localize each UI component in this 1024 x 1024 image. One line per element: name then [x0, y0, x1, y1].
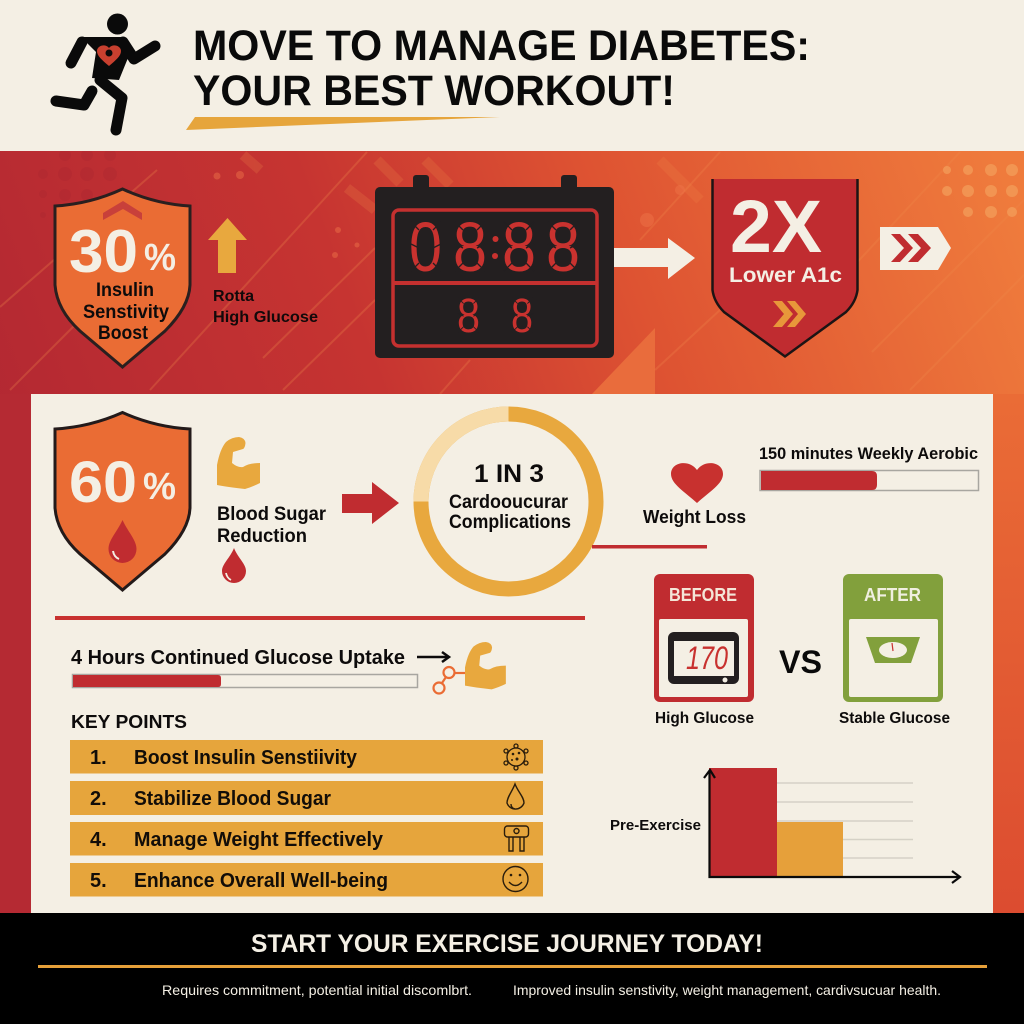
key point 3: [70, 822, 543, 856]
label: blood sugar reduction: Reduction: [217, 526, 307, 547]
main cream panel: [31, 394, 993, 913]
footer: [0, 913, 1024, 1024]
icon: blood drop: [222, 548, 246, 583]
digital timer display: 8: [511, 290, 533, 343]
digital timer display: 0: [409, 208, 442, 286]
key point 1: 1.: [90, 747, 107, 769]
ring stat: 1 in 3: [421, 414, 596, 589]
stat shield: 60%: [55, 412, 190, 590]
red-orange background band: [0, 149, 1024, 913]
label: stable glucose: Stable Glucose: [839, 710, 950, 727]
badge: 2X lower A1c: [712, 179, 858, 357]
before card: 170: [686, 640, 728, 676]
digital timer display: 8: [453, 208, 487, 286]
digital timer display: 8: [457, 290, 480, 343]
icon: heart: [671, 463, 723, 503]
label: high glucose: High Glucose: [655, 710, 754, 727]
icon: upward arrow: [208, 218, 247, 273]
icon: running figure with heart: [56, 14, 155, 130]
digital timer display: [375, 175, 614, 358]
label: weight loss: Weight Loss: [643, 507, 746, 527]
tag: double chevron: [880, 227, 951, 270]
footer: Requires commitment, potential initial discomlbrt.: [162, 982, 472, 998]
key point 3: Manage Weight Effectively: [134, 829, 384, 851]
key point 2: [70, 781, 543, 815]
icon: flexed muscle: [217, 437, 260, 489]
stat shield: 30% insulin sensitivity boost: %: [144, 237, 176, 279]
key point 3: 4.: [90, 829, 107, 851]
ring stat: 1 in 3: Cardooucurar: [449, 492, 569, 513]
label: high glucose: High Glucose: [213, 309, 318, 326]
key point 1: Boost Insulin Senstiivity: [134, 747, 358, 769]
stat shield: 30% insulin sensitivity boost: Senstivity: [83, 302, 169, 323]
digital timer display: 8: [502, 208, 536, 286]
label: vs: VS: [779, 644, 822, 680]
key point 1: [70, 740, 543, 774]
arrow: to muscle: [417, 652, 449, 662]
footer: Improved insulin senstivity, weight management, cardivsucuar health.: [513, 982, 941, 998]
stat shield: 30% insulin sensitivity boost: [55, 189, 190, 367]
stat shield: 30% insulin sensitivity boost: 30: [69, 218, 138, 285]
arrow: red: [342, 482, 399, 524]
key point 4: [70, 863, 543, 896]
key point 2: 2.: [90, 788, 107, 810]
label: blood sugar reduction: [217, 504, 327, 547]
key point 2: Stabilize Blood Sugar: [134, 788, 331, 810]
title: YOUR BEST WORKOUT!: [193, 67, 675, 115]
stat shield: 60%: %: [143, 466, 176, 508]
arrow: timer to badge: [614, 238, 695, 279]
heading: key points: KEY POINTS: [71, 711, 187, 732]
label: high glucose: [213, 288, 318, 326]
progress: 150 minutes weekly aerobic: 150 minutes Weekly Aerobic: [759, 444, 978, 463]
after card: AFTER: [864, 585, 921, 605]
title: MOVE TO MANAGE DIABETES:: [193, 22, 810, 70]
stat shield: 30% insulin sensitivity boost: Insulin: [96, 280, 154, 301]
before card: [654, 574, 754, 702]
header background: [0, 0, 1024, 151]
digital timer display: 8: [546, 208, 580, 286]
title underline swoosh: [186, 117, 500, 130]
stat shield: 60%: 60: [69, 450, 137, 515]
badge: 2X lower A1c: 2X: [730, 185, 822, 268]
progress: 4 hours continued glucose uptake: 4 Hours Continued Glucose Uptake: [71, 647, 405, 669]
progress: 150 minutes weekly aerobic: [759, 444, 978, 490]
after card: [843, 574, 943, 702]
bar chart: pre-exercise: [610, 768, 960, 883]
badge: 2X lower A1c: Lower A1c: [729, 264, 842, 287]
stat shield: 30% insulin sensitivity boost: Boost: [98, 323, 149, 344]
before card: BEFORE: [669, 585, 737, 605]
ring stat: 1 in 3: Complications: [449, 512, 571, 533]
progress: 4 hours continued glucose uptake: [71, 647, 418, 688]
footer: START YOUR EXERCISE JOURNEY TODAY!: [251, 930, 763, 958]
bar chart: pre-exercise: Pre-Exercise: [610, 817, 701, 834]
title: [193, 22, 810, 115]
label: blood sugar reduction: Blood Sugar: [217, 504, 327, 525]
key point 4: 5.: [90, 870, 107, 892]
label: high glucose: Rotta: [213, 288, 254, 305]
icon: muscle with molecule: [434, 642, 506, 694]
ring stat: 1 in 3: 1 IN 3: [474, 460, 544, 488]
key point 4: Enhance Overall Well-being: [134, 870, 388, 892]
